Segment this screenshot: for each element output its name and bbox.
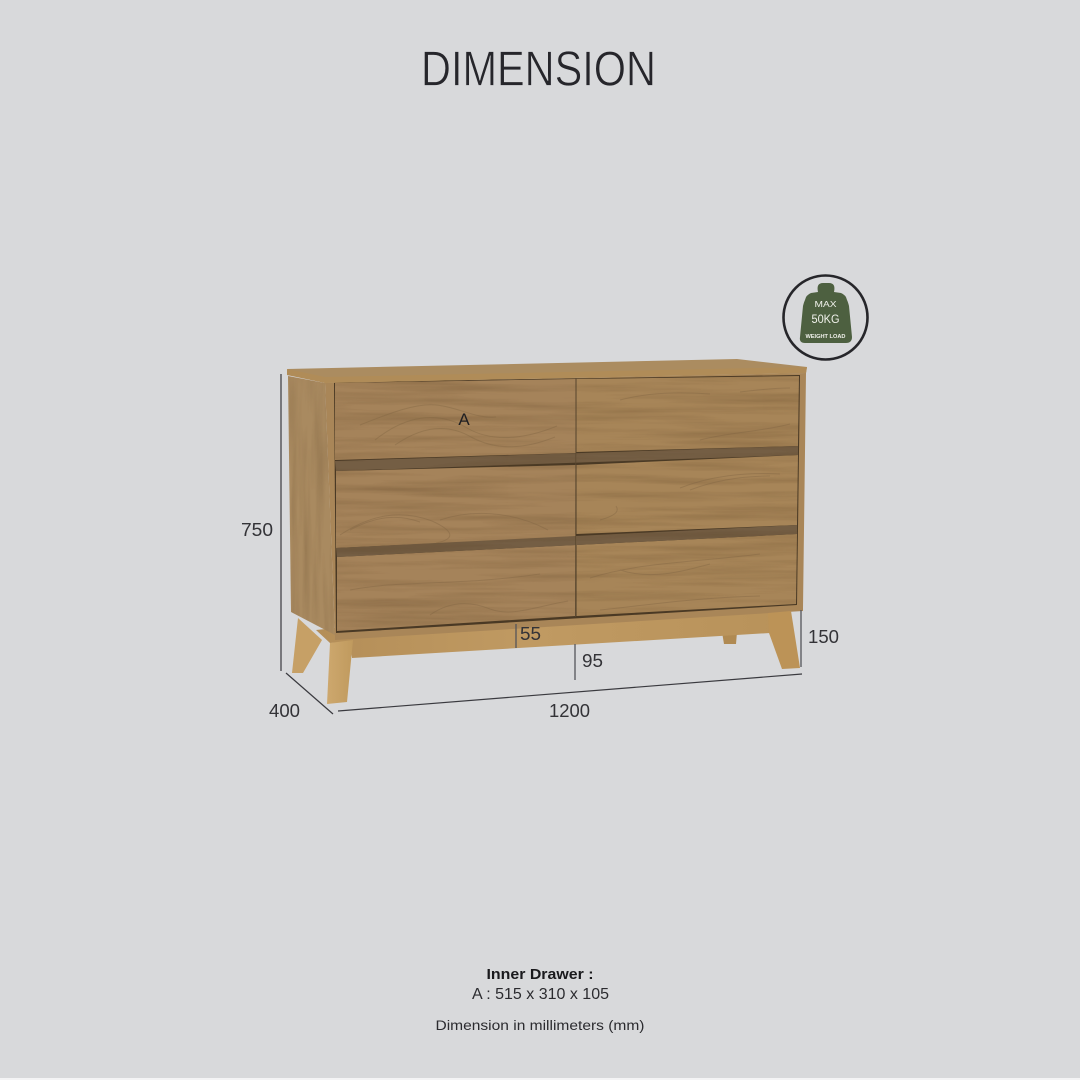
drawer label A: A [458, 410, 470, 429]
inner drawer note: A : 515 x 310 x 105 [472, 986, 609, 1003]
dimension labels: 1200 [549, 701, 590, 721]
side panel [288, 376, 335, 635]
front right leg [768, 611, 800, 669]
drawer fronts [330, 372, 805, 637]
dimension line: apron 55 [515, 624, 517, 648]
apron [316, 606, 790, 658]
inner drawer note: Inner Drawer : [486, 966, 594, 983]
inner drawer note [436, 966, 644, 1033]
front frame [325, 373, 806, 640]
dimension labels: 750 [241, 520, 273, 540]
dimension labels: 95 [582, 651, 603, 671]
back right leg [722, 632, 737, 644]
weight text: WEIGHT LOAD [806, 334, 846, 340]
weight text [806, 300, 846, 340]
back left leg [292, 618, 322, 673]
dimension labels: 55 [520, 624, 541, 644]
chest of drawers [285, 359, 807, 704]
title: DIMENSION [421, 42, 656, 96]
drawer handle grooves [335, 446, 798, 557]
top panel [287, 359, 807, 383]
dimension labels: 400 [269, 701, 300, 721]
icon: weight [800, 283, 852, 343]
badge ring [784, 276, 868, 360]
center divider [574, 378, 577, 617]
dimension line: height 750 [280, 374, 282, 671]
weight text: MAX [814, 300, 837, 309]
max load badge [784, 276, 868, 360]
dimension line: depth 400 [286, 673, 333, 714]
front left leg [327, 640, 353, 704]
dimension line: leg height 150 [800, 610, 802, 667]
dimension labels [241, 520, 839, 721]
weight text: 50KG [812, 314, 840, 326]
dimension labels: 150 [808, 627, 839, 647]
dimension line: width 1200 [338, 674, 802, 711]
inner drawer note: Dimension in millimeters (mm) [436, 1018, 644, 1033]
dimension line: clearance 95 [574, 644, 576, 680]
